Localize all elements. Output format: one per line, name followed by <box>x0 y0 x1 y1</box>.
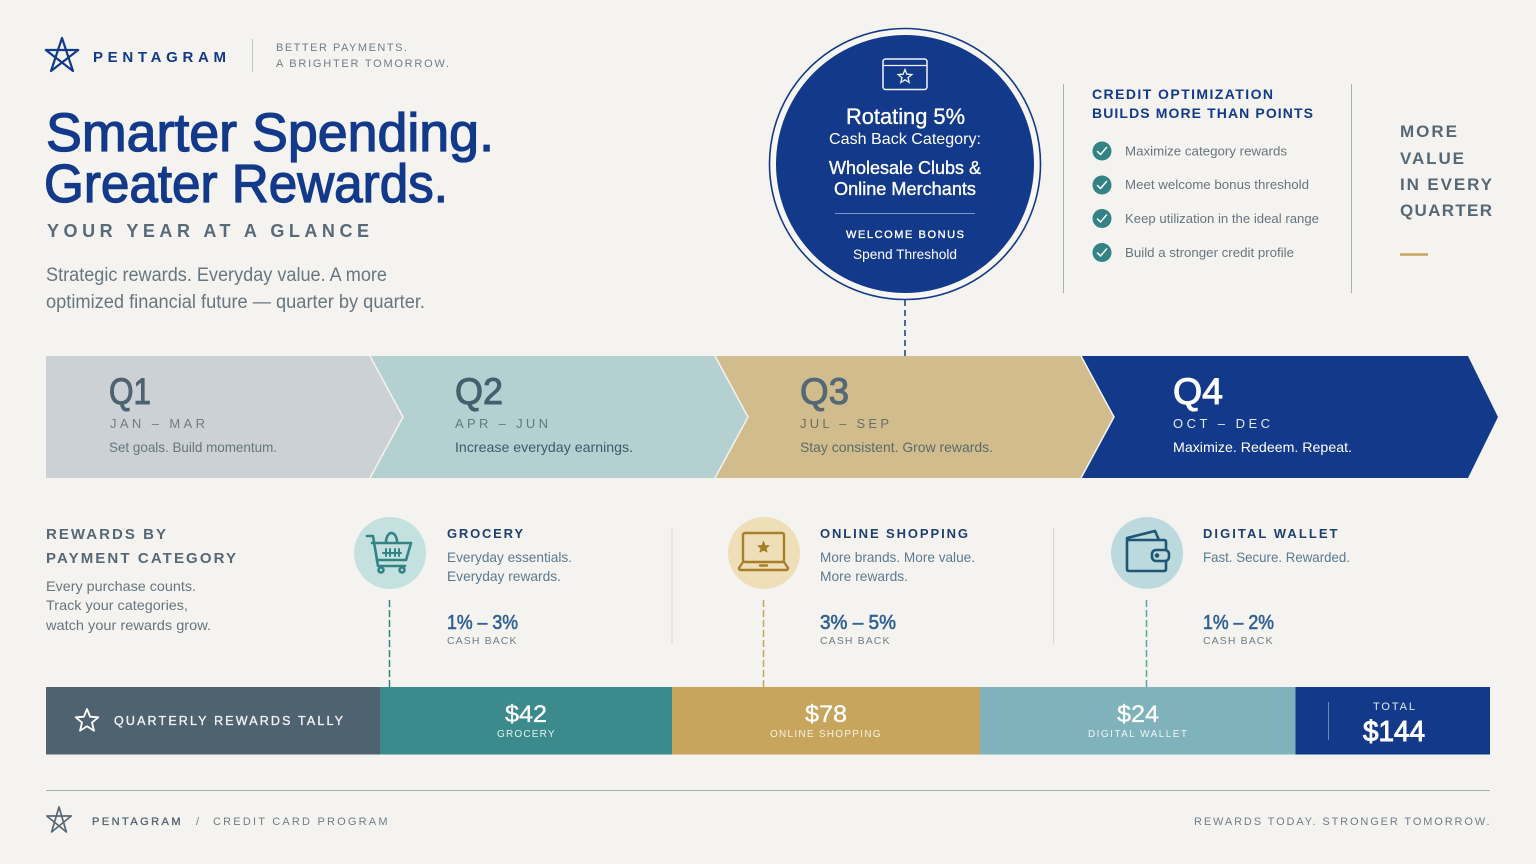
check list: Keep utilization in the ideal range <box>1125 211 1319 226</box>
footer <box>47 807 1489 832</box>
rewards intro text: PAYMENT CATEGORY <box>46 550 236 567</box>
footer left text: CREDIT CARD PROGRAM <box>213 816 388 828</box>
Q2 chevron: Increase everyday earnings. <box>455 439 633 455</box>
category: grocery <box>354 517 572 687</box>
tagline: BETTER PAYMENTS. <box>276 42 407 54</box>
tally: online shopping: ONLINE SHOPPING <box>770 729 881 740</box>
Q1 chevron: Set goals. Build momentum. <box>109 439 277 455</box>
category: digital wallet: 1% – 2% <box>1203 612 1274 634</box>
check list: Meet welcome bonus threshold <box>1125 177 1309 192</box>
intro text <box>46 265 425 313</box>
icon: footer pentagram <box>47 807 71 832</box>
Q3 chevron <box>715 356 1114 478</box>
footer left text: / <box>196 816 200 828</box>
category: digital wallet: DIGITAL WALLET <box>1203 526 1338 541</box>
Q4 chevron: Q4 <box>1173 371 1223 412</box>
title: Greater Rewards. <box>44 154 448 214</box>
category: grocery: 1% – 3% <box>447 612 518 634</box>
title <box>44 103 494 214</box>
circle text: Cash Back Category: <box>829 131 981 148</box>
tally: total: TOTAL <box>1373 701 1415 713</box>
icon: pentagram logo <box>46 38 78 71</box>
tagline <box>276 42 449 70</box>
category: digital wallet: Fast. Secure. Rewarded. <box>1203 549 1350 565</box>
check list <box>1092 142 1319 262</box>
tally label <box>46 687 380 754</box>
panel: credit optimization <box>1064 84 1352 293</box>
Q3 chevron: Stay consistent. Grow rewards. <box>800 439 993 455</box>
callout: more value: MORE <box>1400 122 1457 141</box>
Q4 chevron: OCT – DEC <box>1173 416 1270 431</box>
rewards intro text: Track your categories, <box>46 597 188 613</box>
Q2 chevron: APR – JUN <box>455 416 548 431</box>
tally: digital wallet: $24 <box>1117 701 1159 728</box>
category: online shopping: ONLINE SHOPPING <box>820 526 968 541</box>
circle text <box>829 104 981 262</box>
circle text: Wholesale Clubs & <box>829 158 981 178</box>
category: grocery: CASH BACK <box>447 635 516 647</box>
circle text: WELCOME BONUS <box>846 229 964 241</box>
tagline: A BRIGHTER TOMORROW. <box>276 58 449 70</box>
category: online shopping: More brands. More value. <box>820 549 975 565</box>
category: digital wallet: CASH BACK <box>1203 635 1272 647</box>
rewards intro text: Every purchase counts. <box>46 578 196 594</box>
tally: grocery: GROCERY <box>497 729 555 740</box>
Q4 chevron: Maximize. Redeem. Repeat. <box>1173 439 1352 455</box>
quarter timeline <box>46 356 1498 478</box>
circle text: Rotating 5% <box>846 104 965 129</box>
Q1 chevron: JAN – MAR <box>110 416 205 431</box>
circle text: Spend Threshold <box>853 246 957 262</box>
tally: grocery: $42 <box>505 701 547 728</box>
Q1 chevron: Q1 <box>109 371 151 412</box>
footer left text <box>92 816 388 828</box>
footer left text: PENTAGRAM <box>92 816 180 828</box>
brand header <box>46 38 449 72</box>
Q3 chevron: JUL – SEP <box>800 416 889 431</box>
tally: digital wallet: DIGITAL WALLET <box>1088 729 1187 740</box>
rewards intro text: REWARDS BY <box>46 526 166 543</box>
tally: grocery <box>380 687 672 754</box>
circle text: Online Merchants <box>834 179 976 199</box>
category: digital wallet <box>1111 517 1350 687</box>
category: online shopping: 3% – 5% <box>820 612 896 634</box>
subtitle: YOUR YEAR AT A GLANCE <box>47 221 369 241</box>
Q2 chevron: Q2 <box>455 371 503 412</box>
connector: circle to Q3 <box>904 300 906 356</box>
category: grocery: Everyday rewards. <box>447 568 561 584</box>
tally: online shopping: $78 <box>805 701 847 728</box>
footer right text: REWARDS TODAY. STRONGER TOMORROW. <box>1194 816 1490 828</box>
callout: more value <box>1400 122 1493 254</box>
heading: CREDIT OPTIMIZATION <box>1092 86 1273 102</box>
intro text: optimized financial future — quarter by quarter. <box>46 292 425 313</box>
rewards intro text: watch your rewards grow. <box>45 617 211 633</box>
brand name: PENTAGRAM <box>93 49 226 66</box>
title: Smarter Spending. <box>46 103 494 163</box>
Q2 chevron <box>370 356 748 478</box>
category: grocery: Everyday essentials. <box>447 549 572 565</box>
Q4 chevron <box>1081 356 1498 478</box>
intro text: Strategic rewards. Everyday value. A more <box>46 265 387 286</box>
Q3 chevron: Q3 <box>800 371 849 412</box>
icon: shopping cart <box>354 517 426 589</box>
callout: more value: IN EVERY <box>1400 175 1493 194</box>
tally: total: $144 <box>1363 716 1425 748</box>
tally: online shopping <box>672 687 980 754</box>
callout: more value: VALUE <box>1400 149 1464 168</box>
tally: digital wallet <box>980 687 1296 754</box>
heading: BUILDS MORE THAN POINTS <box>1092 105 1313 121</box>
category: online shopping: More rewards. <box>820 568 908 584</box>
tally: total <box>1296 687 1490 754</box>
rewards intro text <box>45 526 236 633</box>
quarterly rewards tally bar <box>46 687 1490 754</box>
callout: more value: QUARTER <box>1400 201 1492 220</box>
heading <box>1092 86 1313 121</box>
icon: card with star <box>883 59 927 90</box>
category: online shopping: CASH BACK <box>820 635 890 647</box>
panel: rotating category circle <box>770 28 1040 300</box>
icon: wallet <box>1111 517 1183 589</box>
category: grocery: GROCERY <box>447 526 523 541</box>
check list: Maximize category rewards <box>1125 144 1288 158</box>
icon: laptop with star <box>728 517 800 589</box>
tally label: QUARTERLY REWARDS TALLY <box>114 714 344 728</box>
check list: Build a stronger credit profile <box>1125 245 1294 260</box>
Q1 chevron <box>46 356 403 478</box>
category: online shopping <box>728 517 975 687</box>
